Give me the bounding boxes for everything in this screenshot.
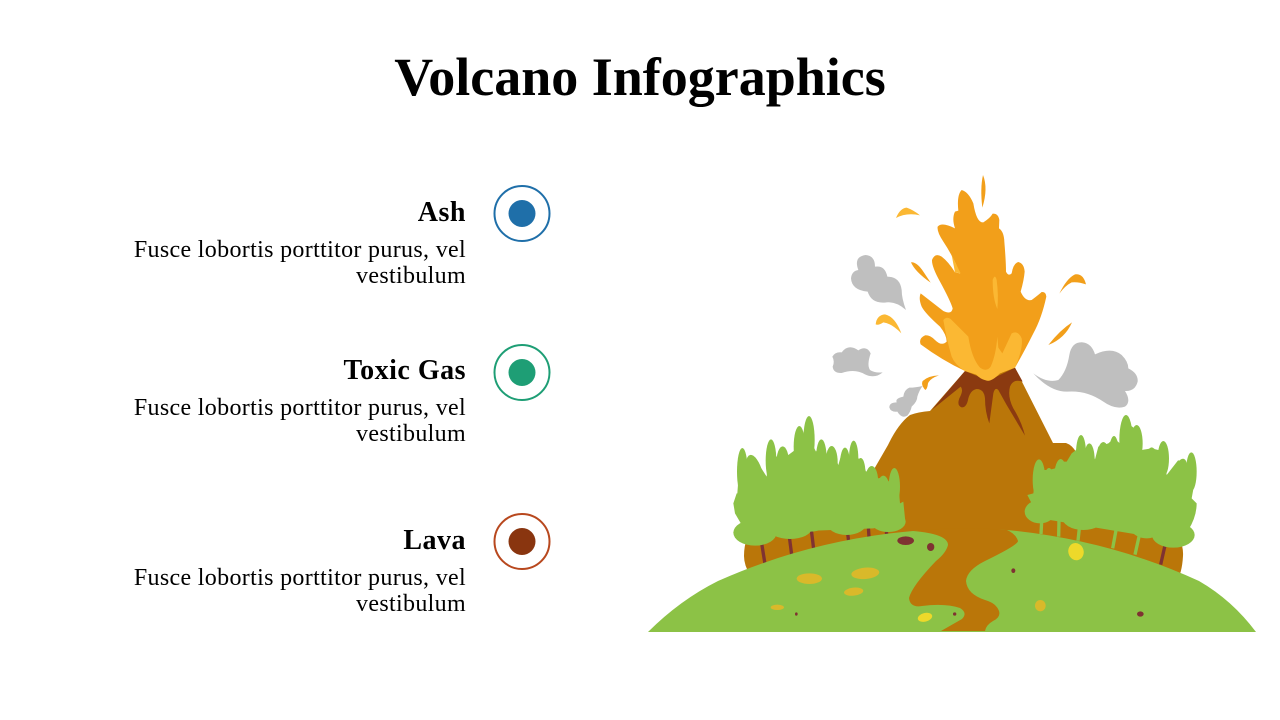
text block: Toxic Gas: Fusce lobortis porttitor purus, vel [134,395,466,421]
lava droplets [876,175,1086,390]
icon: Toxic Gas marker [494,345,550,400]
icon: Ash marker [494,186,550,241]
text block: Ash [134,197,466,289]
tree group left [733,416,906,564]
hill spots [771,536,1144,623]
mountain [744,368,1183,600]
green hill [648,529,1256,632]
foliage right [1025,415,1197,548]
tree group right [1025,415,1197,565]
smoke cloud right [1033,342,1138,408]
flame highlight [943,318,1022,381]
lava flows on crater [932,368,1025,436]
smoke and flame group [832,175,1138,436]
foliage left [733,416,906,546]
tree trunks left [762,527,887,564]
text block: Ash: vestibulum [356,263,466,289]
flame highlight small [952,255,961,273]
eruption flame [920,190,1046,381]
lava river [909,528,1018,631]
text block: Ash: Ash [418,197,466,228]
text block: Lava: vestibulum [356,591,466,617]
text block: Toxic Gas: Toxic Gas [344,355,466,386]
icon: Lava marker [494,514,550,569]
smoke cloud small [889,386,923,417]
smoke cloud upper left [851,255,906,310]
text block: Ash: Fusce lobortis porttitor purus, vel [134,237,466,263]
smoke cloud middle left [832,347,883,376]
flame highlight streak [993,277,998,309]
tree trunks right [1161,545,1165,565]
tree trunks green right [1041,521,1139,555]
text block: Lava [134,525,466,617]
text block: Lava: Lava [403,525,466,556]
text block: Toxic Gas: vestibulum [356,421,466,447]
title: Volcano Infographics [394,47,886,107]
text block: Lava: Fusce lobortis porttitor purus, vel [134,565,466,591]
volcano illustration [648,175,1256,632]
text block: Toxic Gas [134,355,466,447]
